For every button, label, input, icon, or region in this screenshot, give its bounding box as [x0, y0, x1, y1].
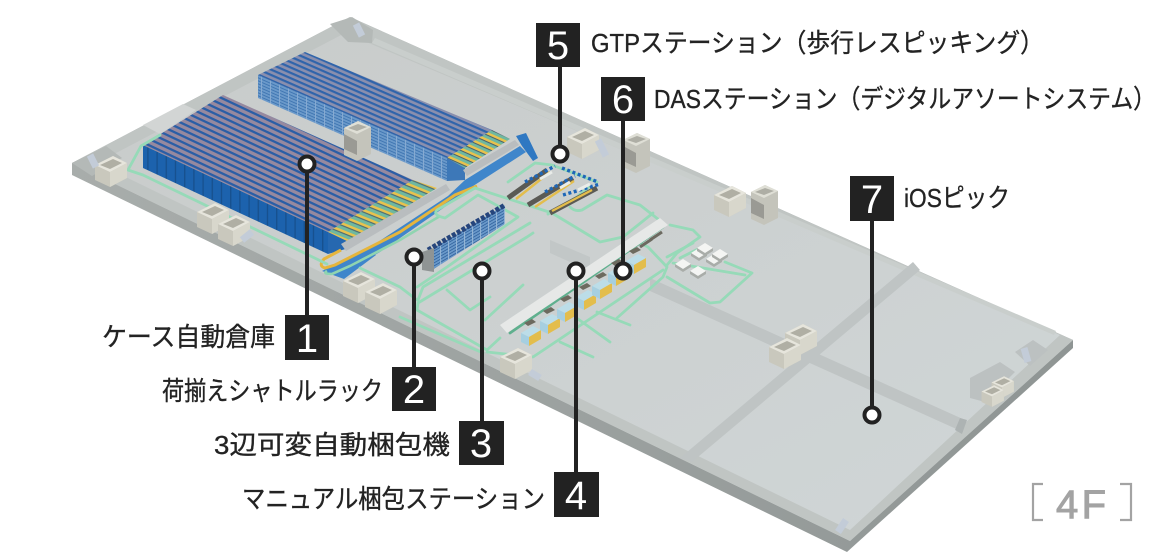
shuttle rack: [422, 205, 505, 272]
label 3: 3: [470, 422, 492, 466]
label 4: マニュアル梱包ステーション: [242, 484, 545, 514]
label 5: 5: [547, 24, 569, 68]
rack: case automated warehouse rear block: [258, 52, 510, 181]
GTP stations: [508, 166, 600, 213]
label 6: [601, 77, 1156, 122]
label 7: iOSピック: [904, 183, 1010, 213]
label 7: 7: [861, 178, 883, 222]
label 2: 2: [403, 368, 425, 412]
label 4: 4: [565, 474, 587, 518]
label 2: 荷揃えシャトルラック: [162, 376, 383, 406]
green conveyor network: [128, 135, 752, 357]
floor tag 4F: 4F: [1056, 483, 1106, 527]
label 6: 6: [612, 78, 634, 122]
label 4: [242, 472, 599, 518]
blue conveyor base and grey rail: [321, 133, 538, 279]
label 1: [102, 315, 329, 361]
label 5: [536, 23, 1044, 68]
manual packing stations: [500, 218, 668, 346]
label 3: 3辺可変自動梱包機: [214, 430, 450, 460]
rack: case automated warehouse front block: [143, 95, 437, 254]
label 1: 1: [296, 317, 318, 361]
leader lines: [300, 66, 880, 473]
label 3: [214, 421, 504, 466]
shaft between racks: [344, 121, 371, 161]
service shafts: [90, 24, 1028, 532]
DAS picking robots: [675, 243, 728, 279]
floor tag 4F: [1033, 483, 1131, 527]
label 1: ケース自動倉庫: [102, 322, 275, 352]
label 5: GTPステーション（歩行レスピッキング）: [591, 28, 1044, 58]
label 7: [850, 176, 1010, 222]
label 2: [162, 367, 436, 412]
